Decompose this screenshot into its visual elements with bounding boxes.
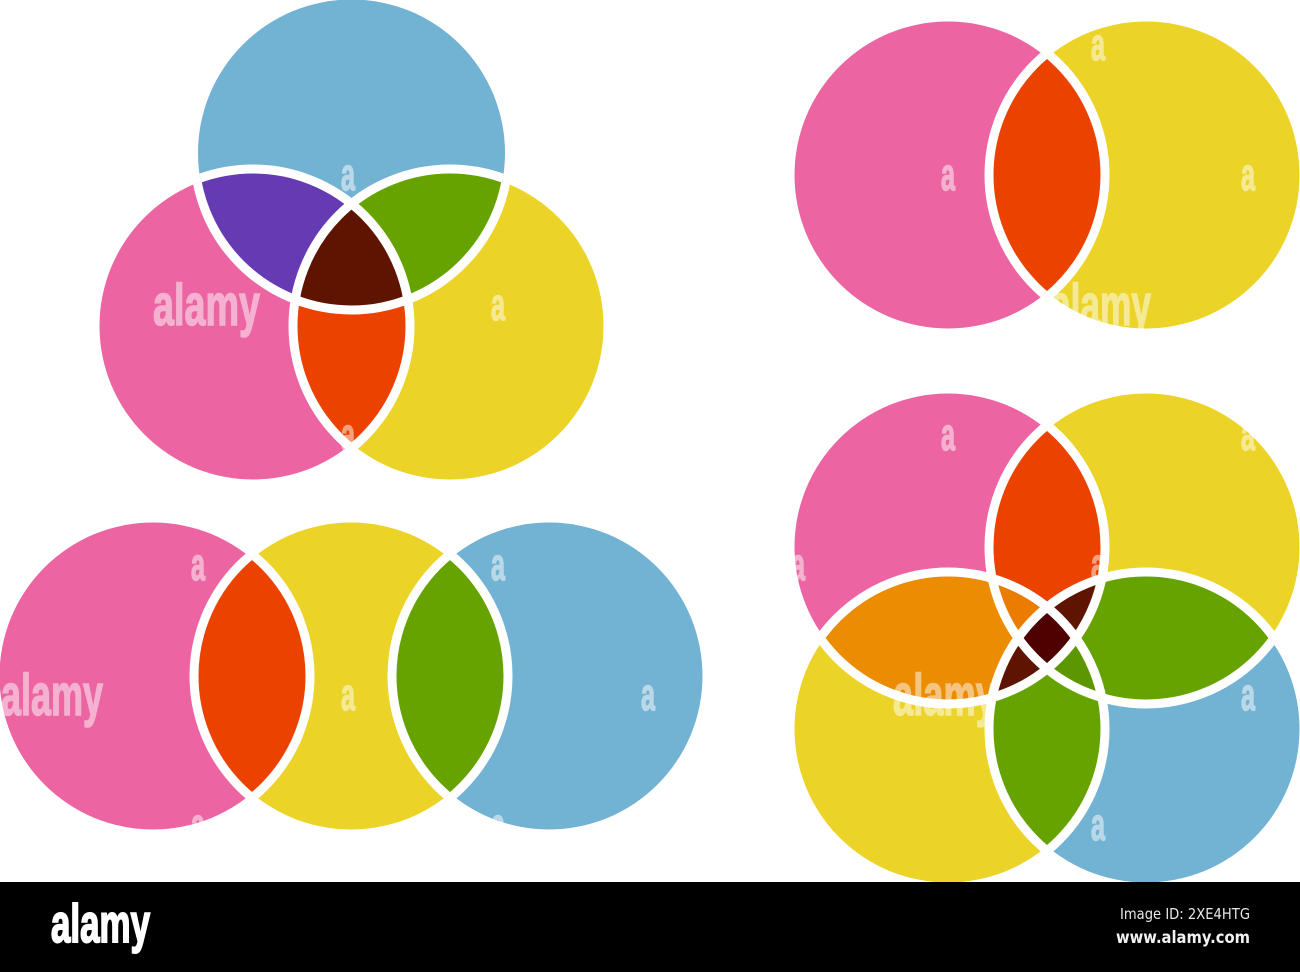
watermark text: a [191, 799, 206, 850]
three-circle triangular venn diagram [96, 0, 607, 483]
watermark text: a [1241, 149, 1256, 200]
watermark text: a [341, 669, 356, 720]
watermark text: alamy [893, 663, 996, 728]
four-circle venn diagram [791, 390, 1300, 886]
footer bar [0, 882, 1300, 972]
watermark text: a [1091, 539, 1106, 590]
watermark text: a [491, 279, 506, 330]
watermark text: a [341, 149, 356, 200]
watermark text: alamy [1, 663, 103, 728]
two-circle venn diagram [791, 18, 1300, 332]
watermark text: a [791, 539, 806, 590]
watermark text: a [491, 799, 506, 850]
footer bar: alamy [51, 894, 150, 954]
watermark text: a [1091, 19, 1106, 70]
watermark text: a [1241, 669, 1256, 720]
three-circle linear venn diagram [0, 519, 706, 833]
watermark text: a [641, 669, 656, 720]
watermark text: alamy [1051, 273, 1151, 338]
watermark text: a [1241, 409, 1256, 460]
watermark text: a [1091, 799, 1106, 850]
watermark text: a [341, 409, 356, 460]
watermark text: a [491, 539, 506, 590]
footer bar: Image ID: 2XE4HTG [1120, 905, 1250, 923]
watermark text: a [941, 409, 956, 460]
watermark text: a [191, 539, 206, 590]
watermark text: a [941, 149, 956, 200]
footer bar: www.alamy.com [1116, 928, 1250, 948]
watermark text: alamy [153, 273, 260, 338]
